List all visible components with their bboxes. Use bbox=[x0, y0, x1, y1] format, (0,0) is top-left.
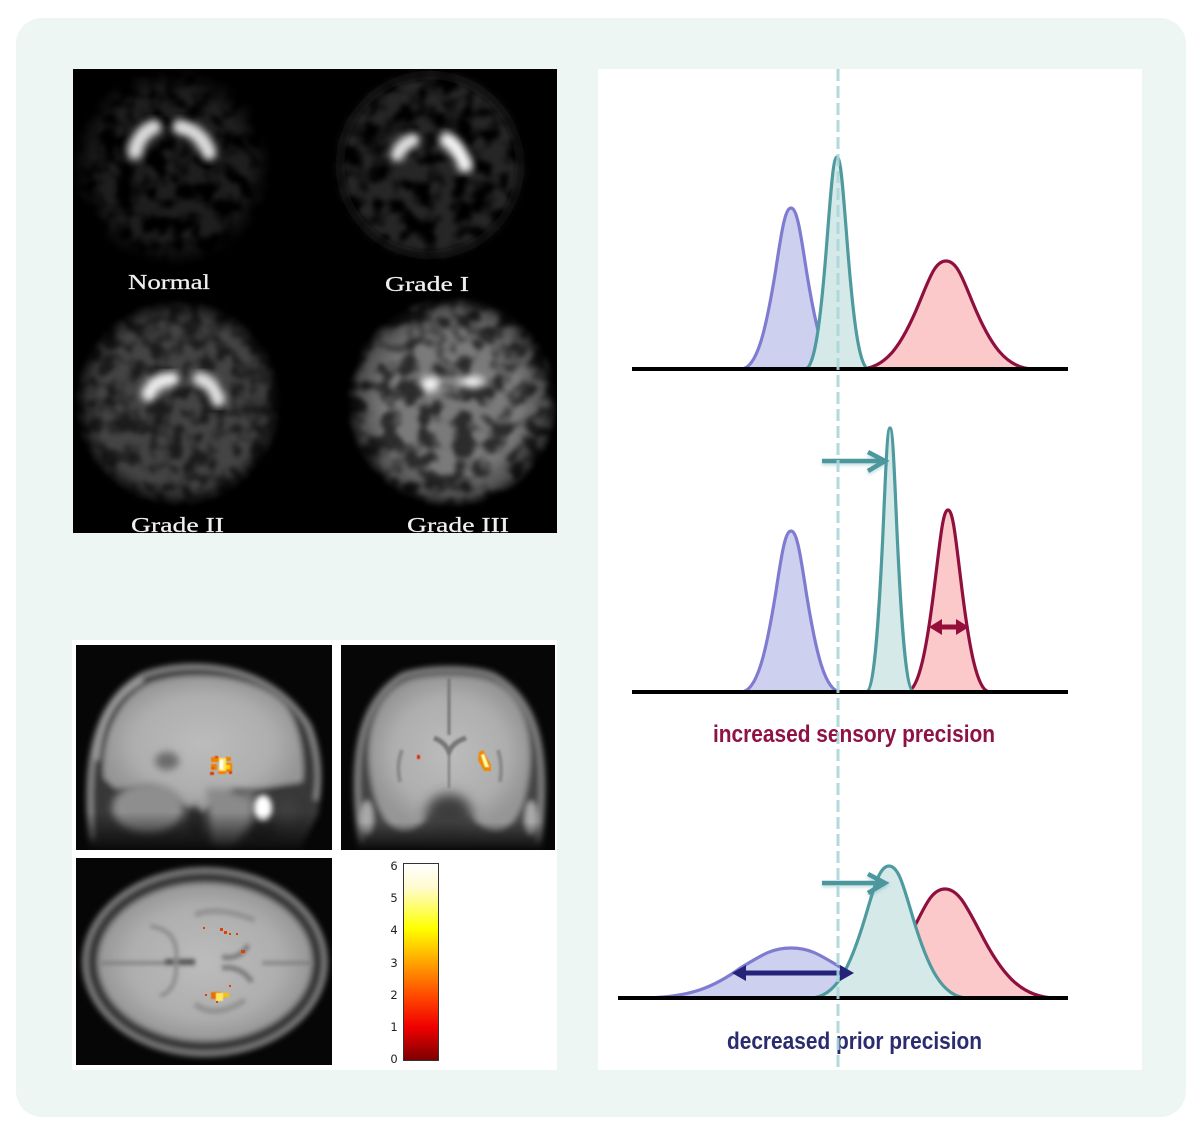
arrow: narrowed sensory width bbox=[929, 619, 969, 635]
label: Grade I: Grade I bbox=[385, 272, 469, 296]
panel: MRI activation maps bbox=[72, 640, 557, 1070]
label: Grade II: Grade II bbox=[131, 513, 224, 537]
colour bar ticks: 2 bbox=[390, 988, 398, 1002]
activation cluster bbox=[210, 756, 232, 775]
colour bar scale bbox=[390, 859, 438, 1066]
colour bar ticks: 3 bbox=[390, 956, 398, 970]
MRI: coronal view bbox=[341, 645, 555, 850]
MRI: axial view bbox=[76, 858, 332, 1065]
colour bar ticks: 5 bbox=[390, 891, 398, 905]
reference line: dashed prior mean bbox=[836, 69, 840, 1070]
chart: baseline distributions bbox=[632, 157, 1068, 371]
colour bar ticks bbox=[390, 859, 398, 1066]
colour bar ticks: 0 bbox=[390, 1052, 398, 1066]
arrow: posterior shift bbox=[822, 452, 885, 471]
label: Normal: Normal bbox=[128, 270, 210, 294]
scan: Grade III bbox=[346, 296, 558, 508]
colour bar ticks: 4 bbox=[390, 923, 398, 937]
MRI: sagittal view bbox=[76, 645, 332, 850]
arrow: widened prior width bbox=[732, 965, 854, 981]
arrow: posterior shift bbox=[822, 874, 885, 893]
scan: Grade I bbox=[332, 67, 528, 263]
panel: precision distributions bbox=[598, 69, 1142, 1070]
colour bar ticks: 1 bbox=[390, 1020, 398, 1034]
panel: SPECT scans by grade bbox=[72, 66, 558, 537]
scan: Normal bbox=[79, 77, 264, 258]
activation cluster bbox=[417, 750, 491, 771]
caption: increased sensory precision: increased sensory precision bbox=[713, 721, 995, 748]
label: Grade III: Grade III bbox=[407, 513, 509, 537]
chart: decreased prior precision bbox=[618, 866, 1068, 1000]
caption: decreased prior precision: decreased prior precision bbox=[727, 1028, 982, 1055]
colour bar ticks: 6 bbox=[390, 859, 398, 873]
scan: Grade II bbox=[74, 299, 282, 507]
chart: increased sensory precision bbox=[632, 428, 1068, 694]
activation cluster bbox=[203, 927, 245, 1003]
